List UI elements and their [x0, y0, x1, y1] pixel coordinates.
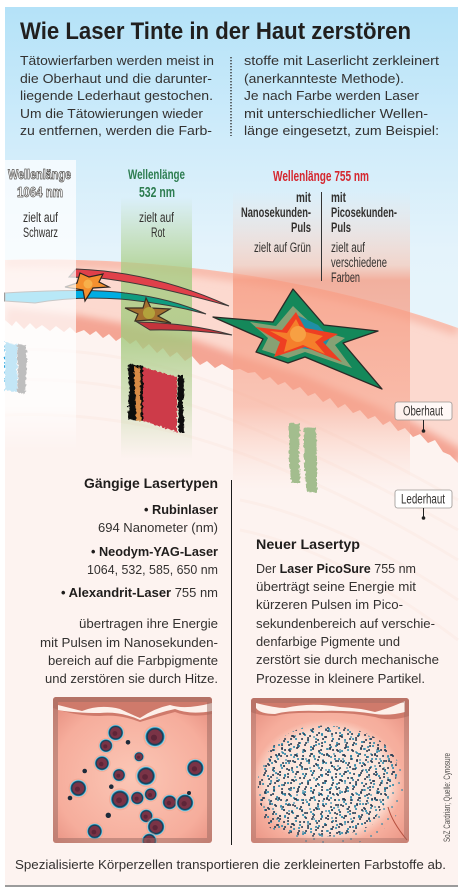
intro text: right column: mit unterschiedlicher Wellen-: [244, 106, 428, 121]
intro text: right column: Je nach Farbe werden Laser: [244, 88, 420, 103]
picosecond pulse text: verschiedene: [331, 255, 387, 270]
intro text: left column: zu entfernen, werden die Farb-: [20, 123, 212, 138]
label: Oberhaut: [395, 402, 452, 433]
text block: common laser types: mit Pulsen im Nanosekunden-: [40, 635, 218, 650]
label: wavelength 755 nm: Wellenlänge 755 nm: [273, 168, 369, 185]
laser column 1064 nm: [5, 160, 76, 450]
picosecond pulse text: zielt auf: [331, 240, 365, 255]
label: Lederhaut: [395, 490, 452, 520]
intro text: left column: liegende Lederhaut gestochen.: [20, 88, 213, 103]
label: wavelength 1064 nm: Schwarz: [23, 225, 58, 240]
picosecond pulse text: Puls: [331, 220, 351, 235]
intro text: right column: (anerkannteste Methode).: [244, 71, 404, 86]
laser streak: red upper: [69, 269, 229, 306]
text block: common laser types: Gängige Lasertypen: [84, 475, 218, 491]
text block: new laser type: Neuer Lasertyp: [256, 536, 360, 552]
text block: common laser types: 1064, 532, 585, 650 nm: [87, 562, 218, 577]
skin layer: epidermis with jagged lower edge: [5, 255, 458, 470]
text block: common laser types: und zerstören sie durch Hitze.: [45, 671, 218, 686]
text block: common laser types: [40, 475, 218, 686]
laser column 755 nm: [233, 190, 410, 490]
intro text: left column: Tätowierfarben werden meist in: [20, 53, 214, 68]
source credit: SoZ Cardrian; Quelle: Cynosure: [442, 753, 453, 842]
text block: new laser type: denfarbige Pigmente und: [256, 634, 400, 649]
text block: common laser types: • Alexandrit-Laser 755 nm: [61, 585, 218, 600]
dotted divider: [230, 57, 232, 136]
caption: Spezialisierte Körperzellen transportieren die zerkleinerten Farbstoffe ab.: [15, 857, 446, 872]
pulse divider: [320, 192, 322, 281]
text block: common laser types: bereich auf die Farbpigmente: [48, 653, 218, 668]
nanosecond pulse text: [241, 190, 311, 255]
panel: pale lower skin background: [5, 262, 458, 886]
label: wavelength 1064 nm: [8, 166, 71, 240]
nanosecond pulse text: mit: [296, 190, 311, 205]
label: Lederhaut: Lederhaut: [401, 492, 445, 506]
picosecond pulse text: [331, 190, 397, 285]
star: large multicoloured pigment star: [213, 289, 382, 389]
bottom rule: [5, 885, 458, 887]
panel: sky background: [5, 7, 458, 345]
intro text: left column: Um die Tätowierungen wieder: [20, 106, 204, 121]
label: wavelength 532 nm: Wellenlänge: [128, 166, 185, 182]
text block: common laser types: • Rubinlaser: [144, 502, 218, 517]
nanosecond pulse text: zielt auf Grün: [254, 240, 311, 255]
nanosecond pulse text: Puls: [291, 220, 311, 235]
text block: common laser types: übertragen ihre Energie: [79, 616, 218, 631]
intro text: left column: [20, 53, 214, 138]
star: olive: [125, 298, 171, 323]
illustration: nanosecond laser pigment clusters: [53, 697, 212, 849]
tattoo pigment: black, orange and red, middle: [128, 364, 184, 433]
text block: common laser types: 694 Nanometer (nm): [98, 520, 218, 535]
picosecond pulse text: Picosekunden-: [331, 205, 397, 220]
label: wavelength 532 nm: 532 nm: [139, 184, 175, 201]
laser streak: blue and green: [5, 290, 206, 314]
label: Oberhaut: Oberhaut: [403, 404, 443, 418]
intro text: right column: [244, 53, 439, 138]
label: wavelength 532 nm: Rot: [151, 225, 165, 240]
label: wavelength 1064 nm: Wellenlänge: [8, 166, 71, 182]
laser streak: red lower: [137, 322, 232, 335]
picosecond pulse text: mit: [331, 190, 346, 205]
laser column 532 nm: [121, 197, 192, 459]
label: wavelength 532 nm: zielt auf: [139, 210, 174, 225]
nanosecond pulse text: Nanosekunden-: [241, 205, 311, 220]
text block: new laser type: Der Laser PicoSure 755 nm: [256, 561, 416, 576]
text block: new laser type: kürzeren Pulsen im Pico-: [256, 597, 403, 612]
illustration: picosecond laser fine particles: [251, 698, 409, 843]
text block: common laser types: • Neodym-YAG-Laser: [91, 544, 218, 559]
intro text: left column: die Oberhaut und die darunter-: [20, 71, 212, 86]
intro text: right column: stoffe mit Laserlicht zerkleinert: [244, 53, 439, 68]
label: wavelength 1064 nm: 1064 nm: [17, 184, 63, 201]
tattoo pigment: blue and grey, left: [5, 342, 27, 394]
title: Wie Laser Tinte in der Haut zerstören: [20, 18, 411, 45]
text block: new laser type: sekundenbereich auf verschie-: [256, 616, 435, 631]
intro text: right column: länge eingesetzt, zum Beispiel:: [244, 123, 439, 138]
text block: new laser type: überträgt seine Energie mit: [256, 579, 416, 594]
center divider: [230, 480, 232, 845]
tattoo pigment: green bars, right: [289, 423, 317, 493]
text block: new laser type: zerstört sie durch mechanische: [256, 652, 439, 667]
text block: new laser type: Prozesse in kleinere Partikel.: [256, 671, 425, 686]
star: orange: [65, 273, 109, 301]
text block: new laser type: [256, 536, 439, 686]
picosecond pulse text: Farben: [331, 270, 360, 285]
label: wavelength 1064 nm: zielt auf: [23, 210, 58, 225]
label: wavelength 532 nm: [128, 166, 185, 240]
